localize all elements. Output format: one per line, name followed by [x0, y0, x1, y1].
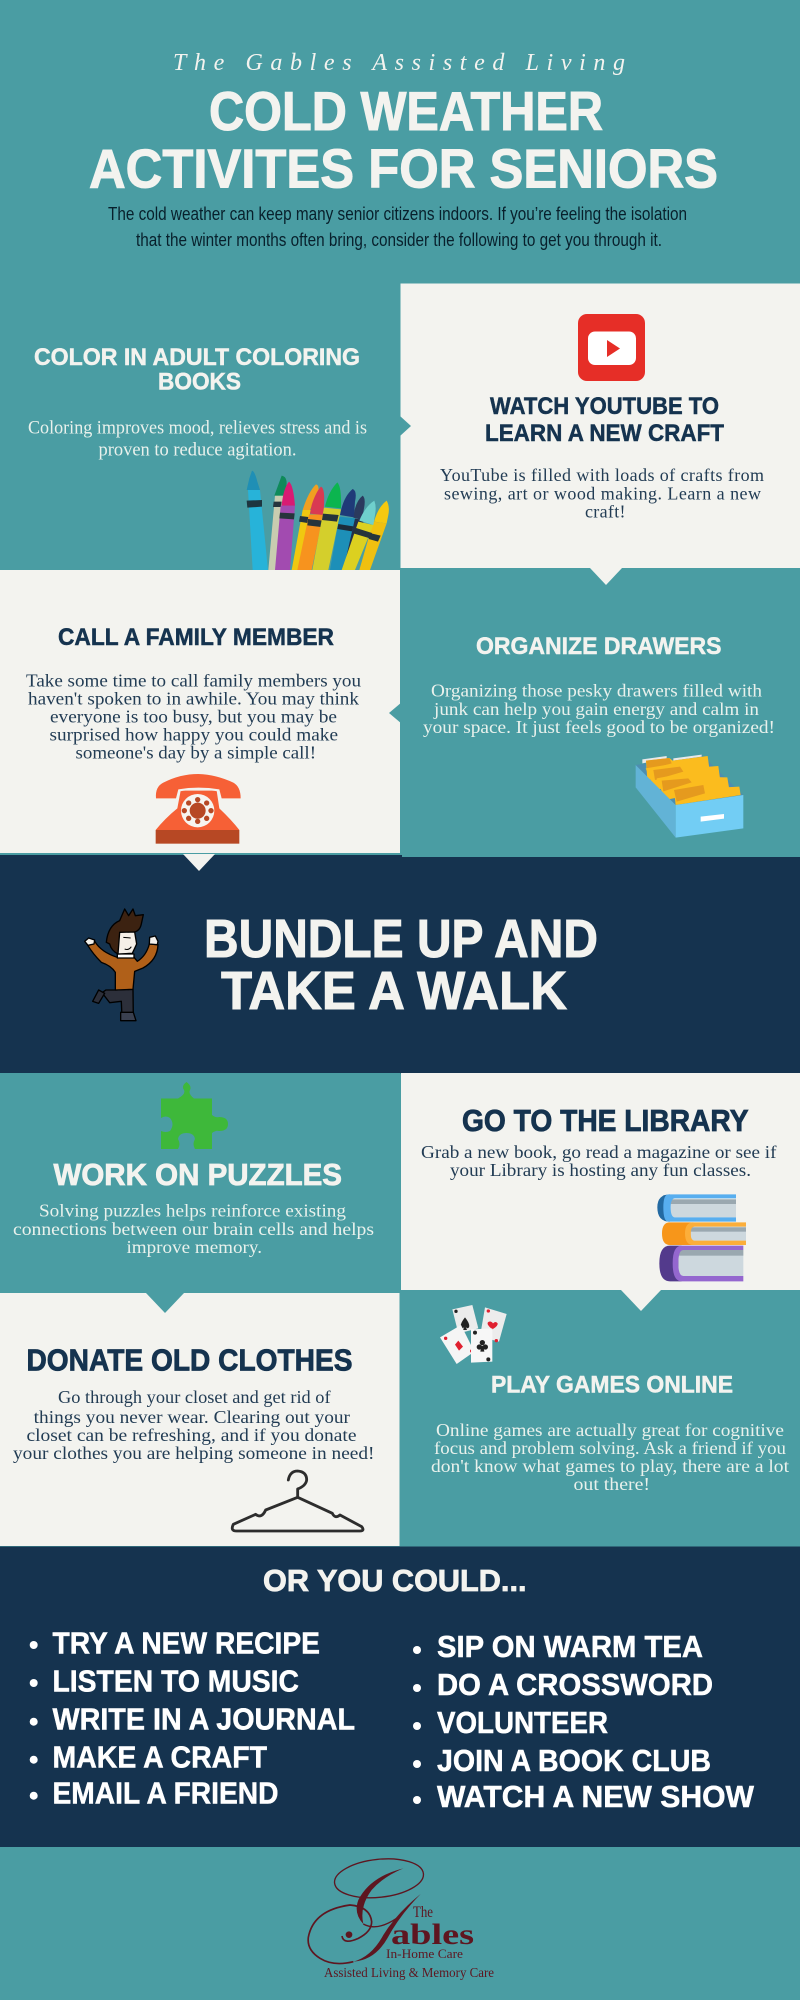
body text: call: Take some time to call family members you [26, 671, 361, 691]
body text: organize: your space. It just feels good to be organized! [423, 717, 775, 737]
body text: coloring: proven to reduce agitation. [98, 440, 296, 460]
list: right column [413, 1629, 755, 1814]
body text: donate: things you never wear. Clearing out your [34, 1407, 350, 1427]
icon: walking man [85, 909, 158, 1021]
icon: file drawer [636, 755, 743, 838]
heading: play games online: PLAY GAMES ONLINE [491, 1372, 733, 1399]
logo: The Gables [308, 1855, 494, 1981]
list: right column: DO A CROSSWORD [437, 1667, 713, 1702]
subtitle: The Gables Assisted Living [173, 50, 625, 76]
heading: bundle up: BUNDLE UP AND [204, 909, 598, 969]
body text: organize: junk can help you gain energy and calm in [433, 699, 759, 719]
title: ACTIVITES FOR SENIORS [89, 138, 718, 200]
panel: watch youtube [400, 284, 800, 585]
body text: coloring [28, 418, 367, 460]
icon: crayons [247, 471, 389, 570]
arrow: organize panel pointer [389, 702, 402, 724]
body text: puzzles: connections between our brain cells and helps [13, 1219, 374, 1239]
arrow: call panel pointer [183, 854, 215, 871]
panel: color in adult coloring books [0, 284, 411, 570]
panel: work on puzzles [0, 1073, 400, 1313]
intro text [108, 204, 687, 250]
panel: or you could [0, 1546, 800, 1847]
heading: or you could: OR YOU COULD... [263, 1563, 526, 1598]
heading: go to the library: GO TO THE LIBRARY [462, 1103, 749, 1138]
list: left column: EMAIL A FRIEND [52, 1776, 278, 1811]
list: right column: JOIN A BOOK CLUB [437, 1743, 711, 1778]
heading: watch youtube: LEARN A NEW CRAFT [485, 420, 724, 447]
body text: puzzles: Solving puzzles helps reinforce existing [39, 1201, 346, 1221]
body text: organize [423, 681, 775, 737]
panel: bundle up and take a walk [0, 855, 800, 1074]
panel: play games online [400, 1290, 800, 1546]
heading: bundle up [204, 909, 598, 1021]
panel: donate old clothes [0, 1293, 400, 1546]
heading: bundle up: TAKE A WALK [221, 961, 567, 1021]
body text: games: out there! [574, 1474, 650, 1494]
heading: coloring books [34, 344, 360, 396]
icon: book stack [657, 1194, 746, 1281]
body text: library: your Library is hosting any fun classes. [450, 1160, 751, 1180]
body text: youtube: craft! [585, 501, 626, 521]
body text: library [421, 1142, 776, 1180]
arrow: youtube panel pointer [590, 568, 622, 585]
body text: donate: your clothes you are helping someone in need! [13, 1443, 374, 1463]
panel: call a family member [0, 570, 400, 871]
body text: donate [13, 1387, 374, 1463]
list: right column: WATCH A NEW SHOW [437, 1779, 755, 1814]
header [89, 50, 718, 250]
arrow: coloring panel pointer [400, 416, 411, 436]
icon: youtube [578, 314, 645, 381]
list: left column: MAKE A CRAFT [52, 1740, 267, 1775]
panel: go to the library [401, 1073, 800, 1311]
intro text: that the winter months often bring, consider the following to get you through it. [136, 230, 662, 250]
list: right column: VOLUNTEER [437, 1705, 608, 1740]
body text: organize: Organizing those pesky drawers filled with [431, 681, 762, 701]
body text: games: focus and problem solving. Ask a friend if you [434, 1438, 786, 1458]
body text: donate: Go through your closet and get rid of [58, 1387, 331, 1407]
arrow: library panel pointer [621, 1290, 661, 1311]
logo text: In-Home Care [386, 1946, 463, 1961]
logo text [324, 1904, 494, 1981]
body text: call: someone's day by a simple call! [76, 743, 316, 763]
title [89, 80, 718, 200]
list: left column: LISTEN TO MUSIC [52, 1664, 299, 1699]
list: left column: WRITE IN A JOURNAL [52, 1702, 355, 1737]
heading: coloring books: BOOKS [158, 369, 241, 396]
icon: playing cards [440, 1305, 507, 1364]
body text: call: everyone is too busy, but you may be [50, 707, 337, 727]
body text: games: Online games are actually great for cognitive [436, 1420, 784, 1440]
body text: puzzles: improve memory. [126, 1237, 262, 1257]
icon: telephone [156, 774, 241, 844]
title: COLD WEATHER [209, 80, 603, 142]
logo text: Assisted Living & Memory Care [324, 1966, 494, 1981]
heading: organize drawers: ORGANIZE DRAWERS [476, 633, 722, 660]
body text: youtube: sewing, art or wood making. Learn a new [444, 484, 761, 504]
heading: watch youtube: WATCH YOUTUBE TO [490, 393, 719, 420]
heading: watch youtube [485, 393, 724, 447]
list: left column: TRY A NEW RECIPE [52, 1626, 320, 1661]
body text: youtube [440, 465, 764, 521]
heading: coloring books: COLOR IN ADULT COLORING [34, 344, 360, 371]
heading: donate old clothes: DONATE OLD CLOTHES [26, 1343, 352, 1378]
body text: donate: closet can be refreshing, and if you donate [26, 1425, 357, 1445]
list: right column: SIP ON WARM TEA [437, 1629, 703, 1664]
body text: games: don't know what games to play, there are a lot [431, 1456, 789, 1476]
heading: work on puzzles: WORK ON PUZZLES [54, 1157, 342, 1192]
list: left column [30, 1626, 355, 1811]
body text: call: surprised how happy you could make [50, 725, 338, 745]
body text: coloring: Coloring improves mood, relieves stress and is [28, 418, 367, 439]
logo mark: script G [308, 1855, 425, 1964]
arrow: puzzles panel pointer [146, 1293, 184, 1313]
logo text: ables [391, 1918, 474, 1951]
panel: organize drawers [389, 568, 800, 857]
body text: games [431, 1420, 789, 1494]
intro text: The cold weather can keep many senior citizens indoors. If you’re feeling the isolation [108, 204, 687, 224]
icon: clothes hanger [232, 1471, 363, 1531]
body text: call: haven't spoken to in awhile. You may think [28, 689, 359, 709]
body text: call [26, 671, 361, 763]
logo text: The [413, 1904, 433, 1921]
icon: puzzle piece [161, 1082, 228, 1149]
body text: youtube: YouTube is filled with loads of crafts from [440, 465, 764, 485]
body text: puzzles [13, 1201, 374, 1257]
heading: call a family member: CALL A FAMILY MEMBER [58, 624, 334, 651]
body text: library: Grab a new book, go read a magazine or see if [421, 1142, 776, 1162]
